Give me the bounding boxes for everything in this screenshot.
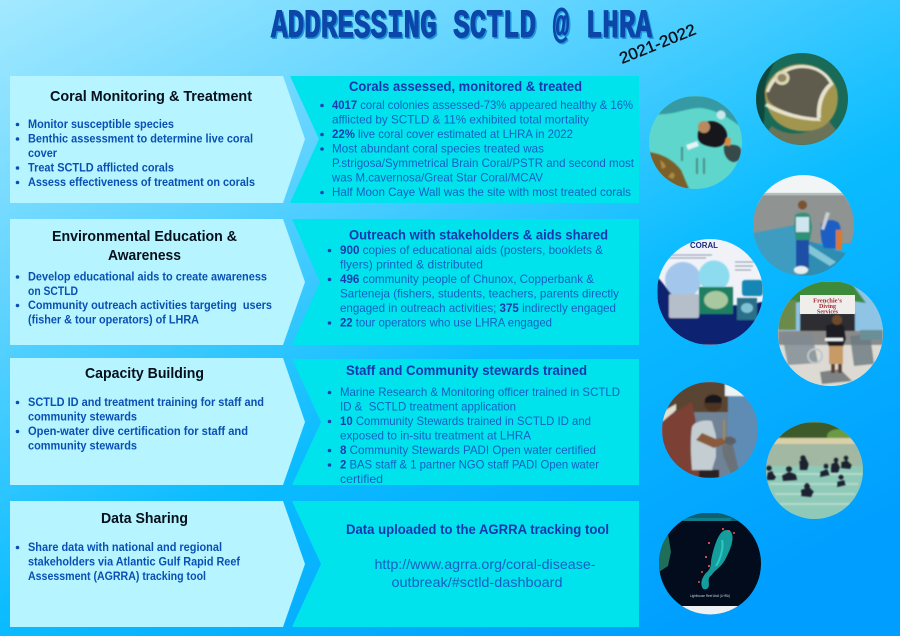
list: coral results: P.strigosa/Symmetrical Brain Coral/PSTR and second most <box>332 156 635 170</box>
link: AGRRA dashboard <box>374 556 596 590</box>
heading: staff trained: Staff and Community stewards trained <box>346 362 587 378</box>
panel: environmental education and awareness <box>10 219 305 345</box>
list: outreach results: 496 community people of Chunox, Copperbank & <box>340 272 594 286</box>
list: coral results: afflicted by SCTLD & 11% exhibited total mortality <box>332 112 589 126</box>
heading: environmental education: Environmental Education & <box>52 228 237 245</box>
heading: environmental education <box>52 228 237 264</box>
list: coral results: Half Moon Caye Wall was the site with most treated corals <box>332 185 631 199</box>
heading: corals assessed: Corals assessed, monitored & treated <box>349 78 582 94</box>
photo: divers in shallow water <box>766 422 863 519</box>
list: training results <box>328 385 620 486</box>
photo: SCTLD educational poster <box>657 239 763 345</box>
list: training results: 2 BAS staff & 1 partner NGO staff PADI Open water <box>340 458 599 472</box>
photo: man mixing treatment <box>662 382 758 478</box>
photo: LHRA map <box>659 513 761 616</box>
list: outreach results: flyers) printed & distributed <box>340 258 483 272</box>
photo: diseased brain coral <box>756 53 848 145</box>
list: training results: Marine Research & Monitoring officer trained in SCTLD <box>340 385 620 399</box>
heading: coral monitoring: Coral Monitoring & Treatment <box>50 88 252 105</box>
list: training results: 8 Community Stewards PADI Open water certified <box>340 443 596 457</box>
sign: Diving <box>819 304 836 310</box>
list: coral results <box>320 98 635 199</box>
photo: Frenchie's Diving Services <box>778 281 883 386</box>
list: education actions: on SCTLD <box>28 284 78 298</box>
photo: SCTLD educational poster: CORAL <box>690 241 718 250</box>
panel: coral monitoring and treatment <box>10 76 305 203</box>
list: coral results: 4017 coral colonies assessed-73% appeared healthy & 16% <box>332 98 633 112</box>
list: outreach results: 22 tour operators who use LHRA engaged <box>340 316 552 330</box>
photo: man on boat with poster <box>753 175 854 276</box>
list: education actions: Community outreach activities targeting users <box>28 298 272 312</box>
panel: data uploaded <box>292 501 639 627</box>
list: education actions: (fisher & tour operators) of LHRA <box>28 312 199 326</box>
list: data sharing actions: Share data with national and regional <box>28 540 222 554</box>
list: coral results: Most abundant coral species treated was <box>332 142 544 156</box>
list: data sharing actions: stakeholders via Atlantic Gulf Rapid Reef <box>28 554 241 568</box>
date label: 2021-2022 <box>617 22 699 68</box>
title: ADDRESSING SCTLD @ LHRA <box>272 6 654 52</box>
sign: Frenchie's <box>813 298 842 304</box>
link: AGRRA dashboard: outbreak/#sctld-dashboard <box>392 574 562 590</box>
list: training results: certified <box>340 472 383 486</box>
list: coral results: was M.cavernosa/Great Star Coral/MCAV <box>331 170 543 184</box>
list: coral monitoring actions: cover <box>28 146 57 160</box>
list: outreach results <box>328 243 619 330</box>
list: coral monitoring actions <box>16 117 255 189</box>
sign <box>800 295 855 316</box>
list: training results: ID & SCTLD treatment application <box>340 400 516 414</box>
panel: capacity building <box>10 358 305 485</box>
heading: capacity building: Capacity Building <box>85 365 204 382</box>
list: coral monitoring actions: Monitor susceptible species <box>28 117 174 131</box>
heading: outreach: Outreach with stakeholders & aids shared <box>349 226 608 242</box>
list: capacity actions: SCTLD ID and treatment training for staff and <box>28 395 264 409</box>
list: capacity actions: community stewards <box>28 438 137 452</box>
list: education actions <box>16 270 272 326</box>
list: outreach results: engaged in outreach activities; 375 indirectly engaged <box>340 301 616 315</box>
list: training results: exposed to in-situ treatment at LHRA <box>340 428 531 442</box>
list: capacity actions: Open-water dive certification for staff and <box>28 424 248 438</box>
list: data sharing actions <box>16 540 241 583</box>
list: training results: 10 Community Stewards trained in SCTLD ID and <box>340 414 591 428</box>
heading: data sharing: Data Sharing <box>101 510 188 527</box>
link: AGRRA dashboard: http://www.agrra.org/coral-disease- <box>374 556 596 572</box>
list: outreach results: Sarteneja (fishers, students, teachers, parents directly <box>340 286 619 300</box>
title: ADDRESSING SCTLD @ LHRA <box>271 5 653 50</box>
panel: staff and community stewards trained <box>292 359 639 486</box>
heading: environmental education: Awareness <box>108 247 181 264</box>
photo: diver surveying reef <box>649 96 742 189</box>
list: capacity actions <box>16 395 264 452</box>
list: capacity actions: community stewards <box>28 410 137 424</box>
list: coral monitoring actions: Treat SCTLD afflicted corals <box>28 160 174 174</box>
list: coral results: 22% live coral cover estimated at LHRA in 2022 <box>332 127 573 141</box>
panel: data sharing <box>10 501 305 627</box>
list: education actions: Develop educational aids to create awareness <box>28 270 267 284</box>
panel: corals assessed, monitored and treated <box>290 76 639 203</box>
photo: LHRA map: Lighthouse Reef Atoll (LHRA) <box>690 594 730 598</box>
list: data sharing actions: Assessment (AGRRA) tracking tool <box>28 569 206 583</box>
list: outreach results: 900 copies of educational aids (posters, booklets & <box>340 243 603 257</box>
heading: data uploaded: Data uploaded to the AGRRA tracking tool <box>346 521 609 537</box>
list: coral monitoring actions: Benthic assessment to determine live coral <box>28 132 253 146</box>
list: coral monitoring actions: Assess effectiveness of treatment on corals <box>28 175 255 189</box>
panel: outreach with stakeholders <box>292 219 639 345</box>
sign: Services <box>817 310 839 316</box>
